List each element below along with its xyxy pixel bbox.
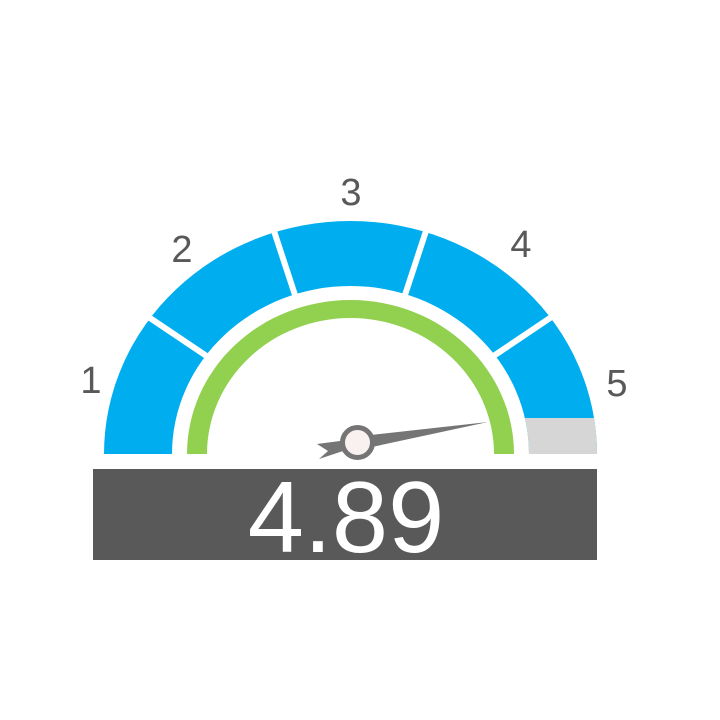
label 4: 4 [510,224,532,266]
value background [93,469,597,560]
needle pointer [317,422,488,459]
label 5: 5 [606,363,628,405]
gauge infographic [83,178,626,560]
needle [317,422,488,459]
scale labels [80,172,628,405]
needle hub [342,428,372,458]
grey unfilled scale portion [525,418,597,454]
blue scale band [104,221,597,454]
green inner arc [187,300,514,454]
segment separators [147,228,553,357]
gauge scale arc [104,221,597,454]
label 2: 2 [171,229,193,271]
label 3: 3 [340,172,362,214]
value text: 4.89 [248,462,444,574]
value bar [93,462,597,574]
label 1: 1 [80,360,102,402]
